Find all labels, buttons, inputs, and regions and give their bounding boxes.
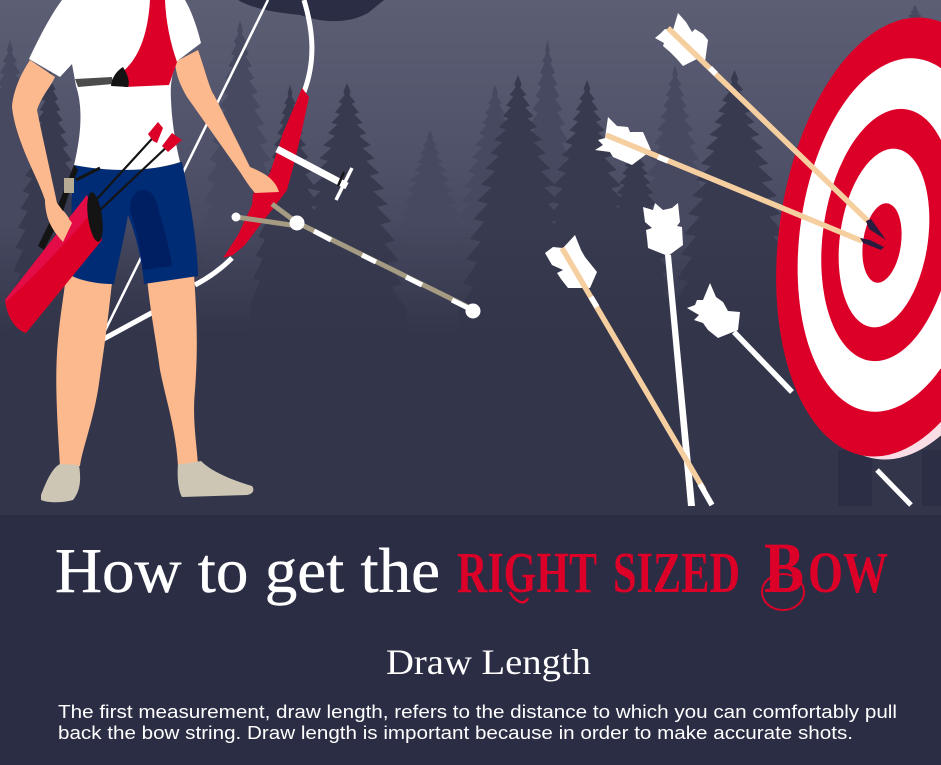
ground	[0, 335, 941, 515]
forest: near trees	[10, 70, 797, 345]
target	[749, 2, 941, 475]
arrow in target: upper	[655, 13, 886, 240]
arrow on ground: white	[643, 203, 695, 506]
dark foliage above the bow	[238, 0, 384, 21]
heading	[55, 528, 888, 610]
body text: back the bow string. Draw length is important because in order to make accurate shots.	[58, 723, 853, 743]
bow	[98, 0, 312, 345]
arrow on ground: tan	[545, 235, 712, 505]
shorts	[72, 162, 198, 284]
body text	[58, 702, 897, 743]
body text: The first measurement, draw length, refers to the distance to which you can comfortably pull	[58, 702, 897, 722]
legs	[56, 274, 198, 466]
forest floor fade	[0, 225, 941, 335]
sash	[122, 0, 177, 87]
title panel	[0, 515, 941, 765]
archer	[5, 0, 279, 502]
scene background	[0, 0, 941, 515]
heading: OW	[808, 540, 888, 605]
shorts shadow	[130, 190, 172, 270]
quiver	[5, 191, 105, 333]
chest strap	[75, 67, 129, 87]
heading: RIGHT	[457, 540, 597, 605]
quiver arrows	[96, 122, 182, 210]
left arm	[12, 60, 72, 242]
arrow stuck low behind target	[687, 283, 792, 392]
heading: How to get the	[55, 536, 440, 606]
target stand	[838, 450, 941, 506]
heading: SIZED	[613, 540, 740, 605]
shoes	[41, 461, 253, 502]
bow stabilizer	[232, 149, 480, 318]
right arm	[175, 50, 279, 193]
quiver belt	[38, 165, 100, 250]
arrow in target: lower	[595, 117, 884, 250]
forest: far trees	[0, 5, 941, 340]
left hand	[46, 203, 72, 242]
shirt	[29, 0, 201, 170]
heading: B	[764, 528, 804, 608]
subheading: draw length: Draw Length	[386, 642, 591, 682]
